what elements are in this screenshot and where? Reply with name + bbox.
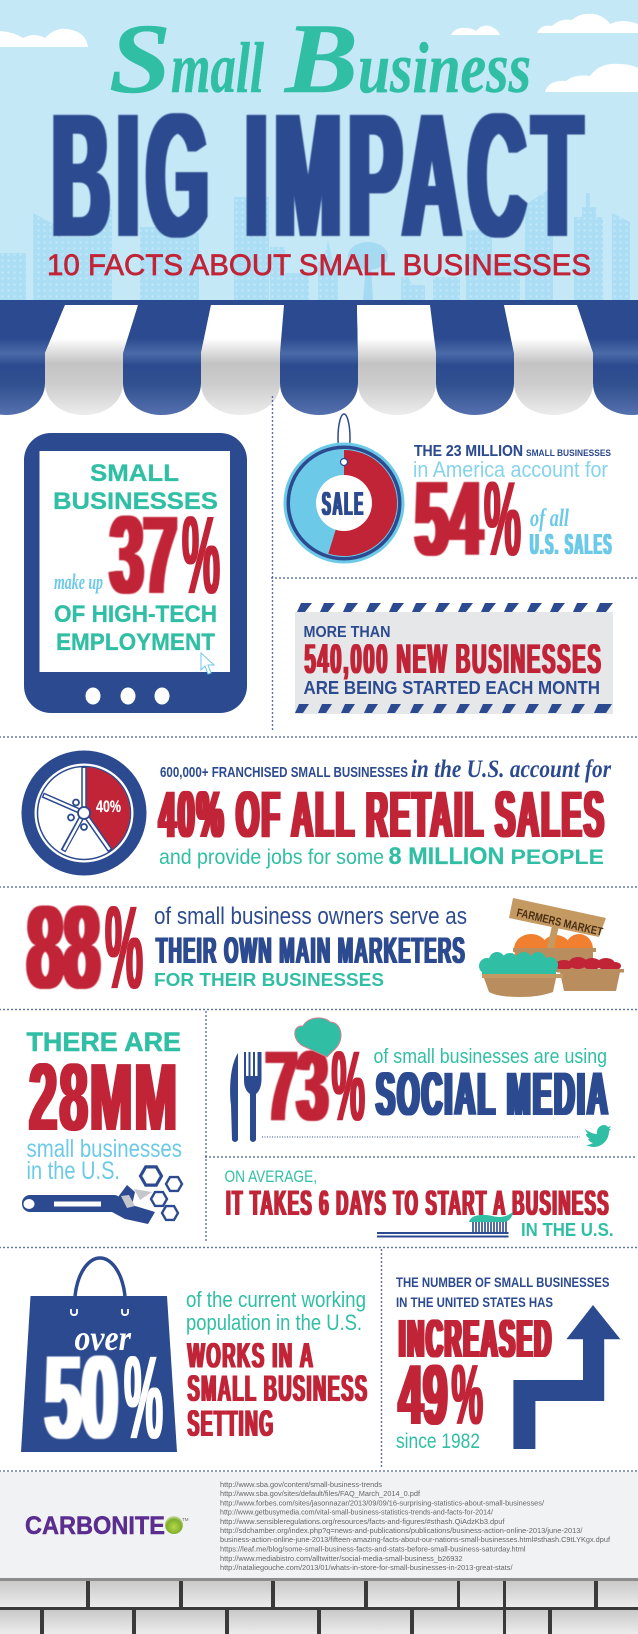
text: 600,000+ franchised: 600,000+ FRANCHISED SMALL BUSINESSES [160,765,408,781]
text: small businesses [53,460,218,515]
text: sources: business-action-online-june-2013/fifteen-amazing-facts-about-our-nations-small-businesses.html#sthash.C9tLYKgx.dpuf [220,1535,611,1544]
text: works in a small business setting: SETTING [188,1402,274,1444]
skyline background [0,187,630,300]
cloud top centre [451,26,500,35]
text: sources: http://sdchamber.org/index.php?q=news-and-publications/publications/business-action-online-2013/june-2013/ [220,1526,583,1535]
text: sources: http://www.sba.gov/content/small-business-trends [220,1480,382,1489]
text: the number of small businesses: IN THE UNITED STATES HAS [396,1295,553,1310]
tree in skyline [348,242,388,300]
text: sources: http://www.sensibleregulations.org/resources/facts-and-figures/#sthash.QiAdzKb3.dpuf [220,1517,505,1526]
panel: franchised retail sales [28,756,611,870]
panel: tablet 37 percent [24,433,247,713]
text: are using: of small businesses are using [374,1046,607,1068]
top stripes [297,603,613,612]
text: there are: THERE ARE [26,1027,181,1057]
text: make up: make up [54,569,103,594]
subtitle: 10 FACTS ABOUT SMALL BUSINESSES [47,249,591,282]
title script: S [109,3,171,114]
text: the 23 million small businesses: THE 23 MILLION [414,443,523,460]
text: sources: http://www.forbes.com/sites/jasonnazar/2013/09/09/16-surprising-statistics-about-small-businesses/ [220,1498,545,1508]
panel: 540,000 new businesses [295,603,613,714]
text: SMALL BUSINESS [188,1367,368,1409]
text: provide jobs: and provide jobs for some [159,846,384,869]
icon: twitter bird [585,1125,611,1147]
panel: increased 49 percent: % [452,1348,483,1443]
icon: cursor [201,653,214,674]
cloud left [0,29,88,47]
icon: wheel [28,757,140,869]
icon: knife and fork [230,1052,262,1142]
panel: 54 percent of sales [284,414,613,578]
text: in America account for: in America account for [413,457,608,482]
panel: over 50 percent [21,1258,368,1464]
stat 37 percent: 37 [110,494,177,617]
stat 49 percent: 49 [398,1348,448,1443]
text: sources [220,1480,611,1572]
icon: wrench and nuts [22,1167,182,1224]
icon: wheel: 40% [96,797,121,816]
bottom stripes [295,704,612,713]
text: more than: MORE THAN [304,624,390,641]
panel: 73 percent social media [230,1018,611,1147]
text: sources: https://leaf.me/blog/some-small-business-facts-and-stats-before-small-business-saturday.html [220,1544,526,1554]
stat 73 percent: 73 [266,1030,328,1141]
panel: 6 days to start [224,1167,614,1240]
icon: sale tag [284,414,404,564]
text: are being started: ARE BEING STARTED EACH MONTH [304,678,600,698]
tablet screen [40,451,230,672]
cloud right [545,64,638,92]
text: of high-tech employment: OF HIGH-TECH [54,601,217,628]
stat 88 percent: 88 [27,882,100,1014]
tablet buttons [86,688,170,704]
icon: shopping bag: % [124,1332,163,1464]
logo: carbonite: CARBONITE [25,1512,165,1540]
text: current working population [186,1287,366,1335]
arrow: growth [513,1305,620,1449]
panel: 28MM small businesses [22,1027,182,1224]
stat 28MM: 28MM [29,1044,179,1151]
text: provide jobs: PEOPLE [510,845,604,869]
icon: toothbrush [377,1212,513,1238]
text: sources: http://www.getbusymedia.com/vital-small-business-statistics-trends-and-facts-for-2014/ [220,1508,494,1516]
text: the number of small businesses [396,1275,610,1310]
panel: footer [0,1472,638,1578]
text: the 23 million small businesses: SMALL BUSINESSES [526,448,611,459]
text: on average: ON AVERAGE, [224,1167,317,1186]
icon: farmers market: FARMERS MARKET [515,907,604,939]
panel: tablet 37 percent: % [182,494,220,617]
text: for their businesses: FOR THEIR BUSINESSES [154,970,384,990]
text: works in a small business setting: WORKS IN A [188,1336,314,1376]
cloud top right [537,14,638,33]
panel: increased 49 percent [396,1275,620,1453]
text: current working population: population in the U.S. [186,1310,362,1335]
stat 54 percent: 54 [415,460,482,578]
text: small businesses in the U.S.: small businesses [26,1135,182,1163]
panel: 88 percent marketers [27,882,624,1014]
grey box [295,612,613,714]
panel: 73 percent social media: % [332,1030,365,1141]
icon: chef hat [295,1018,341,1057]
text: owners serve as: of small business owners serve as [154,903,467,930]
text: small businesses in the U.S. [26,1135,182,1185]
text: current working population: of the current working [186,1287,366,1312]
text: small businesses: BUSINESSES [53,488,218,515]
brick wall [0,1578,638,1634]
text: works in a small business setting [188,1336,368,1444]
icon: shopping bag: 50 [45,1332,118,1464]
title script: usiness [358,28,531,108]
text: the 23 million small businesses [414,443,611,460]
text: of all: of all [530,505,569,532]
text: since 1982: since 1982 [396,1430,480,1453]
icon: shopping bag [21,1258,177,1464]
panel: header sky [0,0,638,300]
logo: carbonite: TM [182,1517,189,1522]
text: small businesses: SMALL [90,460,179,487]
panel: 88 percent marketers: % [105,882,143,1014]
icon: shopping bag: over [74,1318,132,1358]
text: of high-tech employment [54,601,217,656]
text: sources: http://www.mediabistro.com/alltwitter/social-media-small-business_b26932 [220,1554,462,1563]
text: provide jobs [159,843,604,870]
text: sources: http://www.sba.gov/sites/default/files/FAQ_March_2014_0.pdf [220,1489,421,1498]
title script: B [284,3,358,114]
icon: tablet body [24,433,247,713]
title script: mall [171,28,264,108]
awning [0,300,638,415]
icon: sale tag: SALE [322,485,365,522]
text: provide jobs: 8 MILLION [388,843,504,870]
text: small businesses in the U.S.: in the U.S. [26,1157,120,1185]
panel: 54 percent of sales: % [484,460,521,578]
text: of high-tech employment: EMPLOYMENT [56,629,215,656]
text: sources: http://nataliegouche.com/2013/01/whats-in-store-for-small-businesses-in-2013-great-stats/ [220,1563,513,1572]
icon: farmers market [479,898,624,997]
text: in the U.S.: IN THE U.S. [521,1220,614,1240]
